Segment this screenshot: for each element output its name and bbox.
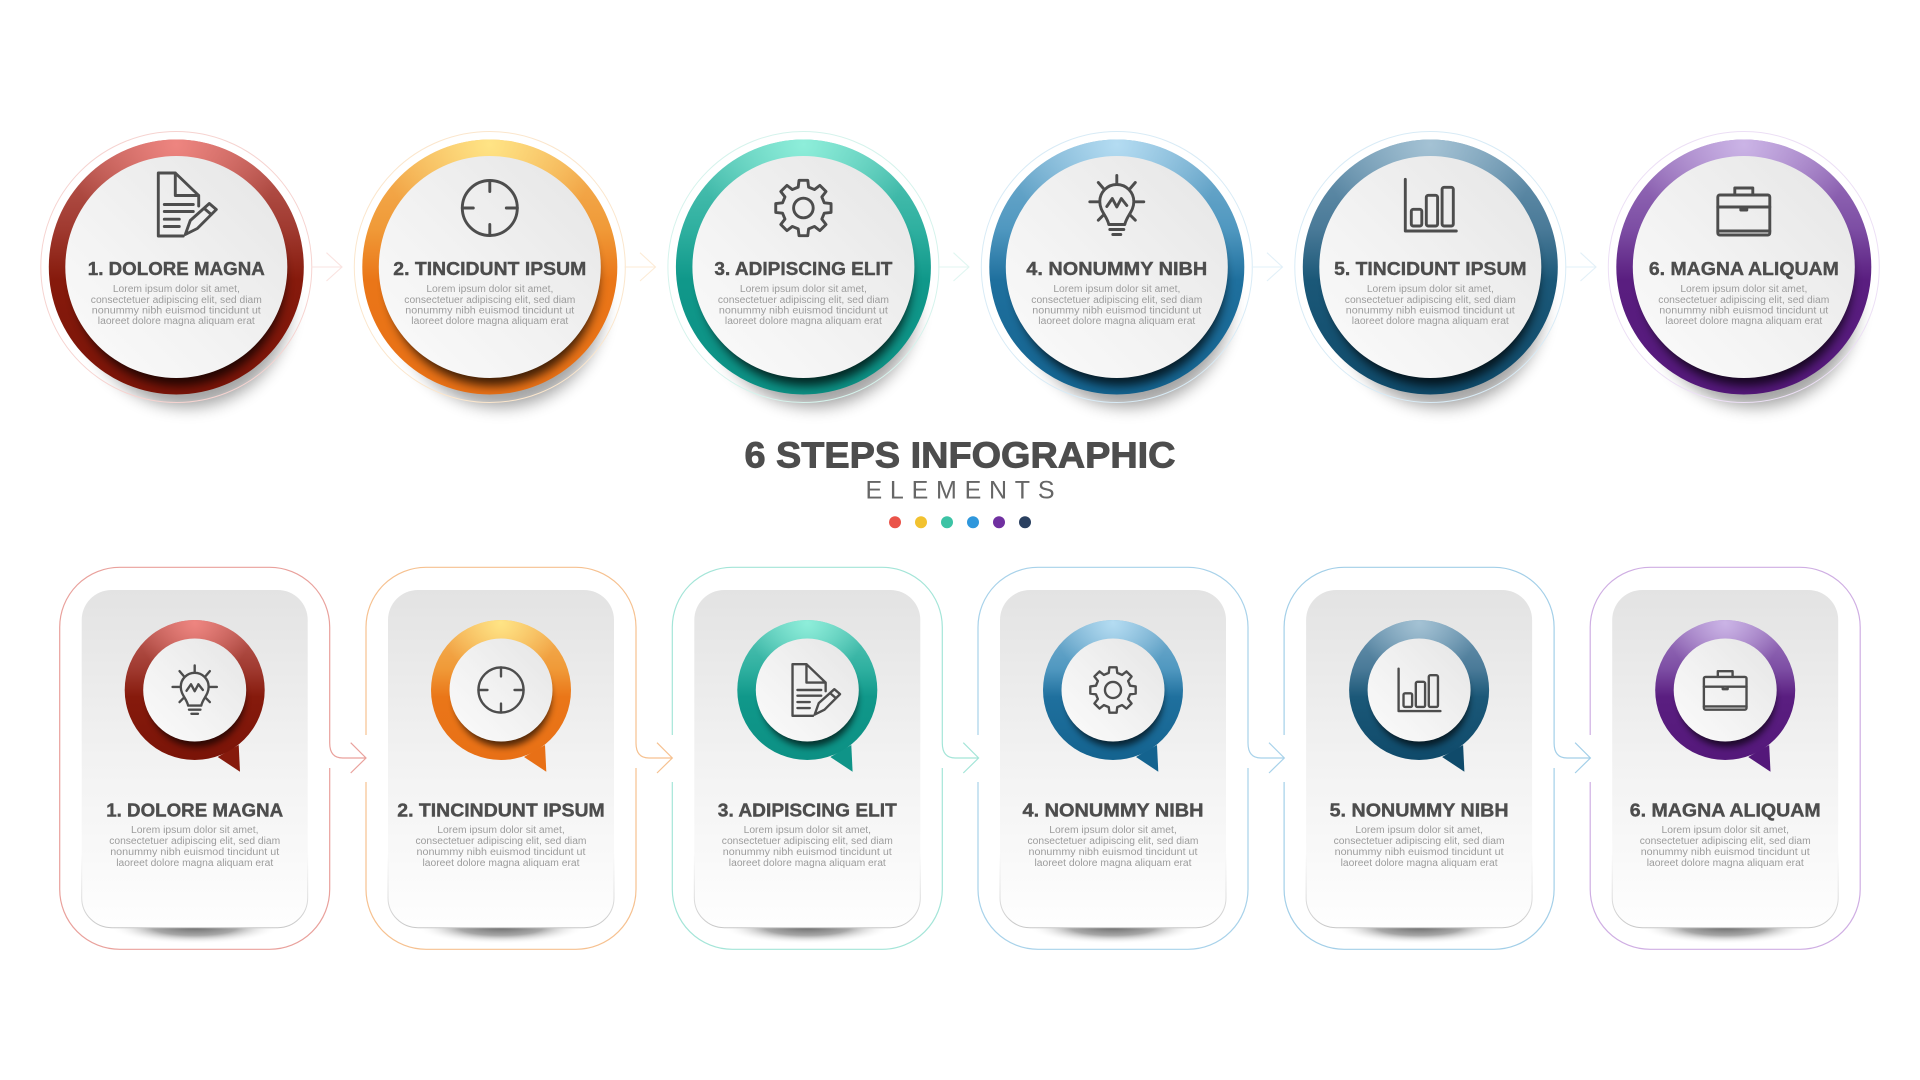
body text: Lorem ipsum dolor sit amet,	[1355, 825, 1483, 836]
body text: laoreet dolore magna aliquam erat	[98, 316, 255, 327]
body text: consectetuer adipiscing elit, sed diam	[1031, 295, 1202, 306]
body text: Lorem ipsum dolor sit amet,	[1049, 825, 1177, 836]
body text	[404, 284, 575, 327]
speech bubble	[125, 620, 265, 772]
step 1 circle	[41, 132, 312, 407]
body text: laoreet dolore magna aliquam erat	[729, 858, 886, 869]
body text: laoreet dolore magna aliquam erat	[1647, 858, 1804, 869]
body text	[1345, 284, 1516, 327]
icon: document	[158, 173, 216, 236]
body text: consectetuer adipiscing elit, sed diam	[1658, 295, 1829, 306]
heading: 2. TINCIDUNT IPSUM	[393, 258, 586, 279]
body text: nonummy nibh euismod tincidunt ut	[719, 306, 888, 316]
body text: nonummy nibh euismod tincidunt ut	[1641, 847, 1810, 858]
body text	[1334, 825, 1505, 869]
heading: 4. NONUMMY NIBH	[1026, 258, 1207, 279]
heading: 5. TINCIDUNT IPSUM	[1334, 258, 1527, 279]
heading: 1. DOLORE MAGNA	[106, 800, 283, 821]
ring shadow and outline	[1295, 132, 1566, 407]
body text	[91, 284, 262, 327]
body text: nonummy nibh euismod tincidunt ut	[1028, 847, 1198, 858]
card 3	[672, 567, 979, 949]
body text: nonummy nibh euismod tincidunt ut	[723, 847, 892, 858]
inner disc	[379, 156, 601, 378]
body text: consectetuer adipiscing elit, sed diam	[1028, 836, 1198, 847]
body text	[109, 825, 280, 869]
body text: laoreet dolore magna aliquam erat	[1038, 316, 1196, 327]
outline with arrow	[672, 567, 979, 949]
body text	[1031, 284, 1202, 327]
heading: 2. TINCINDUNT IPSUM	[397, 800, 605, 821]
body text: consectetuer adipiscing elit, sed diam	[1334, 836, 1505, 847]
body text: Lorem ipsum dolor sit amet,	[437, 825, 565, 836]
inner disc	[65, 156, 287, 378]
colour dots	[889, 516, 1031, 528]
outline with arrow	[1284, 567, 1590, 949]
arrow 2	[624, 253, 656, 281]
card 1	[60, 567, 366, 949]
card 4	[978, 567, 1284, 949]
step 4 circle	[981, 132, 1252, 407]
gradient ring	[676, 140, 931, 394]
inner panel	[1306, 590, 1532, 928]
step 3 circle	[668, 132, 939, 407]
body text: nonummy nibh euismod tincidunt ut	[92, 306, 261, 316]
icon: gear	[776, 180, 831, 236]
body text: Lorem ipsum dolor sit amet,	[426, 284, 553, 295]
arrow 5	[1565, 253, 1596, 281]
card shadow	[110, 910, 280, 944]
heading: 5. NONUMMY NIBH	[1330, 800, 1509, 821]
heading: 4. NONUMMY NIBH	[1022, 800, 1204, 821]
ring shadow and outline	[354, 132, 625, 407]
body text: Lorem ipsum dolor sit amet,	[740, 284, 867, 295]
inner panel	[82, 590, 308, 928]
body text: laoreet dolore magna aliquam erat	[1341, 858, 1498, 869]
body text: consectetuer adipiscing elit, sed diam	[722, 836, 893, 847]
body text: Lorem ipsum dolor sit amet,	[1661, 825, 1789, 836]
speech bubble	[1655, 620, 1795, 772]
inner disc	[1633, 156, 1855, 378]
body text: laoreet dolore magna aliquam erat	[411, 316, 569, 327]
card shadow	[1640, 910, 1810, 944]
step 6 circle	[1608, 132, 1879, 407]
card shadow	[1334, 910, 1504, 944]
body text: consectetuer adipiscing elit, sed diam	[1640, 836, 1811, 847]
body text: Lorem ipsum dolor sit amet,	[131, 825, 258, 836]
body text: Lorem ipsum dolor sit amet,	[1680, 284, 1807, 295]
arrow 3	[938, 253, 969, 281]
speech bubble	[1043, 620, 1183, 772]
body text: Lorem ipsum dolor sit amet,	[113, 284, 240, 295]
body text	[1658, 284, 1829, 327]
gradient ring	[1616, 140, 1871, 394]
body text: nonummy nibh euismod tincidunt ut	[110, 847, 279, 858]
title: 6 STEPS INFOGRAPHIC	[744, 435, 1176, 476]
body text: laoreet dolore magna aliquam erat	[1034, 858, 1192, 869]
card 2	[366, 567, 672, 949]
icon: briefcase	[1718, 188, 1770, 235]
body text: laoreet dolore magna aliquam erat	[1352, 316, 1509, 327]
speech bubble	[1349, 620, 1489, 772]
body text: consectetuer adipiscing elit, sed diam	[416, 836, 586, 847]
ring shadow and outline	[668, 132, 939, 407]
inner disc	[1006, 156, 1228, 378]
body text: laoreet dolore magna aliquam erat	[422, 858, 580, 869]
body text: consectetuer adipiscing elit, sed diam	[1345, 295, 1516, 306]
icon: light bulb	[1090, 176, 1144, 234]
ring shadow and outline	[41, 132, 312, 407]
body text: consectetuer adipiscing elit, sed diam	[718, 295, 889, 306]
heading: 6. MAGNA ALIQUAM	[1630, 800, 1821, 821]
body text: consectetuer adipiscing elit, sed diam	[404, 295, 575, 306]
body text: nonummy nibh euismod tincidunt ut	[1032, 306, 1202, 316]
inner panel	[1612, 590, 1838, 928]
heading: 1. DOLORE MAGNA	[88, 258, 265, 279]
heading: 3. ADIPISCING ELIT	[718, 800, 897, 821]
body text: nonummy nibh euismod tincidunt ut	[1346, 306, 1515, 316]
ring shadow and outline	[1608, 132, 1879, 407]
body text	[1028, 825, 1198, 869]
body text: consectetuer adipiscing elit, sed diam	[109, 836, 280, 847]
heading: 3. ADIPISCING ELIT	[714, 258, 893, 279]
inner panel	[1000, 590, 1226, 928]
body text: Lorem ipsum dolor sit amet,	[1053, 284, 1180, 295]
icon: bar chart	[1405, 179, 1456, 231]
outline with arrow	[978, 567, 1284, 949]
gradient ring	[1303, 140, 1558, 394]
body text: consectetuer adipiscing elit, sed diam	[91, 295, 262, 306]
body text: nonummy nibh euismod tincidunt ut	[416, 847, 586, 858]
inner panel	[388, 590, 614, 928]
card shadow	[416, 910, 586, 944]
body text: laoreet dolore magna aliquam erat	[116, 858, 273, 869]
gradient ring	[49, 140, 304, 394]
body text: laoreet dolore magna aliquam erat	[1665, 316, 1823, 327]
arrow 4	[1252, 253, 1282, 281]
ring shadow and outline	[981, 132, 1252, 407]
inner disc	[1319, 156, 1541, 378]
subtitle: ELEMENTS	[866, 477, 1054, 505]
body text: nonummy nibh euismod tincidunt ut	[405, 306, 575, 316]
body text	[718, 284, 889, 327]
body text	[722, 825, 893, 869]
step 2 circle	[354, 132, 625, 407]
gradient ring	[989, 140, 1244, 394]
card shadow	[722, 910, 892, 944]
outline with arrow	[366, 567, 672, 949]
card shadow	[1028, 910, 1198, 944]
speech bubble	[431, 620, 571, 772]
step 5 circle	[1295, 132, 1566, 407]
body text: nonummy nibh euismod tincidunt ut	[1335, 847, 1504, 858]
body text	[1640, 825, 1811, 869]
outline	[1590, 567, 1860, 949]
inner disc	[692, 156, 914, 378]
body text: laoreet dolore magna aliquam erat	[725, 316, 882, 327]
inner panel	[694, 590, 920, 928]
outline with arrow	[60, 567, 366, 949]
gradient ring	[362, 140, 617, 394]
card 6	[1590, 567, 1860, 949]
heading: 6. MAGNA ALIQUAM	[1649, 258, 1839, 279]
speech bubble	[737, 620, 877, 772]
arrow 1	[311, 253, 342, 281]
icon: target	[462, 180, 517, 236]
body text	[416, 825, 586, 869]
body text: Lorem ipsum dolor sit amet,	[1367, 284, 1494, 295]
body text: Lorem ipsum dolor sit amet,	[744, 825, 871, 836]
card 5	[1284, 567, 1590, 949]
body text: nonummy nibh euismod tincidunt ut	[1659, 306, 1829, 316]
